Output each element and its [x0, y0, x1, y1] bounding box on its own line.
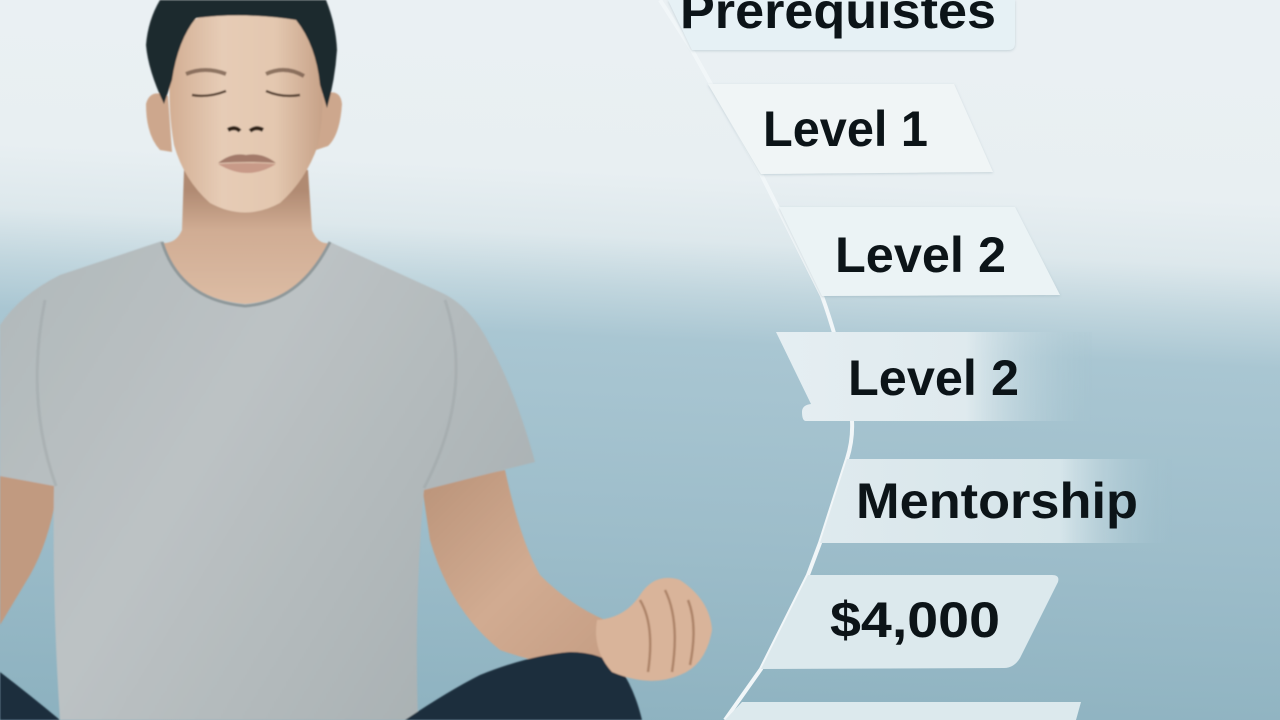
right arm — [422, 470, 610, 672]
pants — [0, 652, 642, 720]
step: Level 1 — [708, 84, 993, 174]
hair — [146, 0, 337, 108]
step: Level 2 repeated: Level 2 — [848, 350, 1019, 406]
face — [169, 10, 323, 212]
lips — [218, 154, 276, 163]
collar — [162, 242, 330, 306]
shirt — [0, 241, 535, 720]
step: Level 1: Level 1 — [763, 101, 928, 157]
step: $4,000 — [761, 575, 1058, 669]
neck — [162, 170, 330, 304]
step: Level 2 — [779, 207, 1060, 296]
hand — [596, 578, 712, 681]
step: Prerequistes — [668, 0, 1015, 50]
nose — [228, 128, 263, 131]
closed eyes — [192, 91, 300, 96]
shirt shading — [37, 300, 456, 488]
step: Level 2: Level 2 — [835, 227, 1006, 283]
curved spine line — [660, 0, 852, 720]
step: cropped bottom panel — [725, 702, 1081, 720]
step: Mentorship — [820, 459, 1172, 543]
step: $4,000: $4,000 — [830, 592, 1000, 648]
person meditating — [0, 0, 712, 720]
step: Mentorship: Mentorship — [856, 473, 1138, 529]
finger lines — [640, 590, 694, 672]
left arm — [0, 476, 58, 625]
step: Level 2 repeated — [776, 332, 1092, 421]
ears — [146, 92, 342, 152]
eyebrows — [186, 70, 304, 76]
